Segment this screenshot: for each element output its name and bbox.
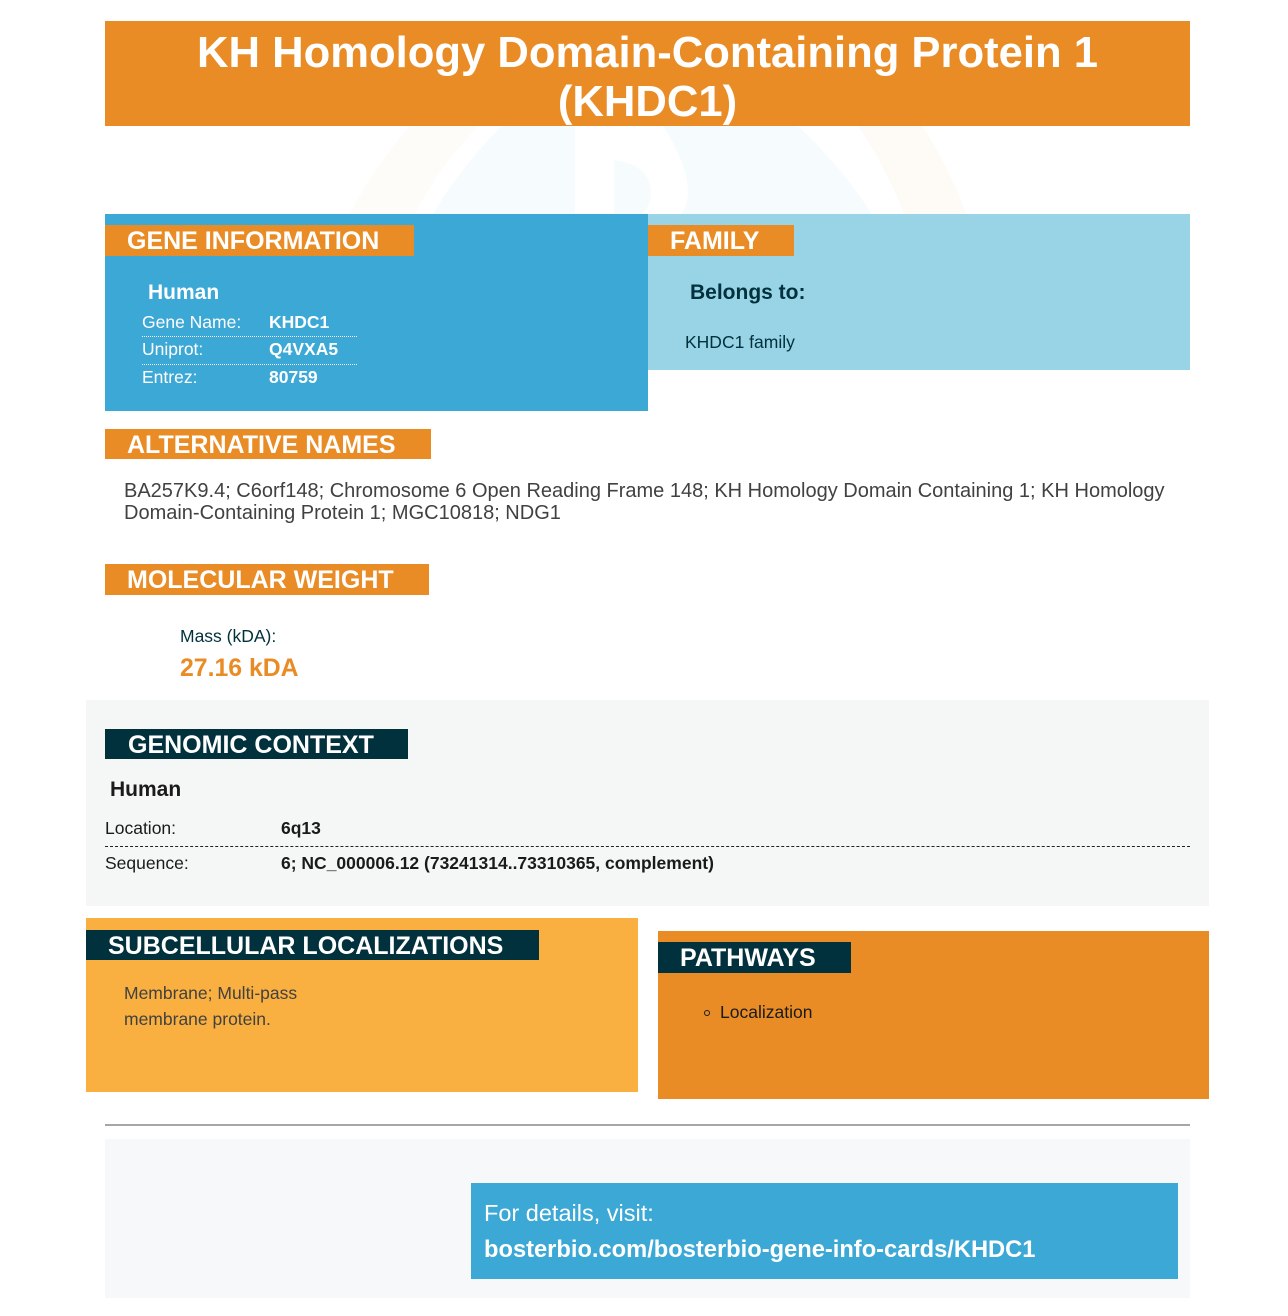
localization text: Membrane; Multi-pass membrane protein. bbox=[124, 983, 297, 1029]
location row: Location: bbox=[105, 818, 176, 838]
heading: subcellular localizations: SUBCELLULAR LOCALIZATIONS bbox=[108, 932, 503, 960]
entrez row: 80759 bbox=[269, 367, 318, 387]
pathway item: Localization bbox=[720, 1002, 812, 1022]
panel: alternative names bbox=[105, 429, 1165, 524]
location row: 6q13 bbox=[281, 818, 321, 838]
footer panel bbox=[105, 1139, 1190, 1298]
gene name row: KHDC1 bbox=[269, 312, 329, 332]
url: bosterbio.com/bosterbio-gene-info-cards/KHDC1 bbox=[484, 1237, 1035, 1263]
uniprot row: Q4VXA5 bbox=[269, 339, 338, 359]
heading: family: FAMILY bbox=[670, 227, 759, 255]
heading: pathways: PATHWAYS bbox=[680, 944, 816, 972]
uniprot row bbox=[142, 339, 357, 365]
heading: molecular weight: MOLECULAR WEIGHT bbox=[127, 566, 394, 594]
mass value: 27.16 kDA bbox=[180, 655, 299, 682]
species label: Human bbox=[148, 281, 219, 304]
belongs to label: Belongs to: bbox=[690, 281, 806, 304]
visit label: For details, visit: bbox=[484, 1200, 654, 1226]
family value: KHDC1 family bbox=[685, 332, 795, 352]
panel: molecular weight bbox=[105, 564, 429, 682]
title banner bbox=[105, 21, 1190, 126]
panel: gene information bbox=[105, 214, 648, 411]
call to action box bbox=[471, 1183, 1178, 1279]
location row bbox=[105, 816, 1190, 847]
title banner: (KHDC1) bbox=[558, 78, 737, 126]
panel: family bbox=[648, 214, 1190, 370]
species label: Human bbox=[110, 778, 181, 801]
watermark logo bbox=[434, 126, 966, 214]
sequence row: 6; NC_000006.12 (73241314..73310365, complement) bbox=[281, 853, 714, 873]
panel: subcellular localizations bbox=[86, 918, 638, 1092]
gene name row bbox=[142, 311, 357, 337]
heading: gene information: GENE INFORMATION bbox=[127, 227, 379, 255]
heading: pathways bbox=[658, 942, 851, 973]
gene name row: Gene Name: bbox=[142, 312, 241, 332]
heading: family bbox=[648, 225, 794, 256]
uniprot row: Uniprot: bbox=[142, 339, 203, 359]
entrez row: Entrez: bbox=[142, 367, 197, 387]
entrez row bbox=[142, 367, 318, 387]
title banner: KH Homology Domain-Containing Protein 1 bbox=[197, 29, 1098, 77]
panel: genomic context bbox=[86, 700, 1209, 906]
panel: pathways bbox=[658, 931, 1209, 1099]
alternative names text: BA257K9.4; C6orf148; Chromosome 6 Open Reading Frame 148; KH Homology Domain Containing 1; KH Homology Domain-Containing Protein 1; MGC10818; NDG1 bbox=[124, 480, 1165, 524]
heading: genomic context: GENOMIC CONTEXT bbox=[128, 731, 374, 759]
heading: alternative names: ALTERNATIVE NAMES bbox=[127, 431, 396, 459]
sequence row: Sequence: bbox=[105, 853, 189, 873]
mass label: Mass (kDA): bbox=[180, 626, 276, 646]
